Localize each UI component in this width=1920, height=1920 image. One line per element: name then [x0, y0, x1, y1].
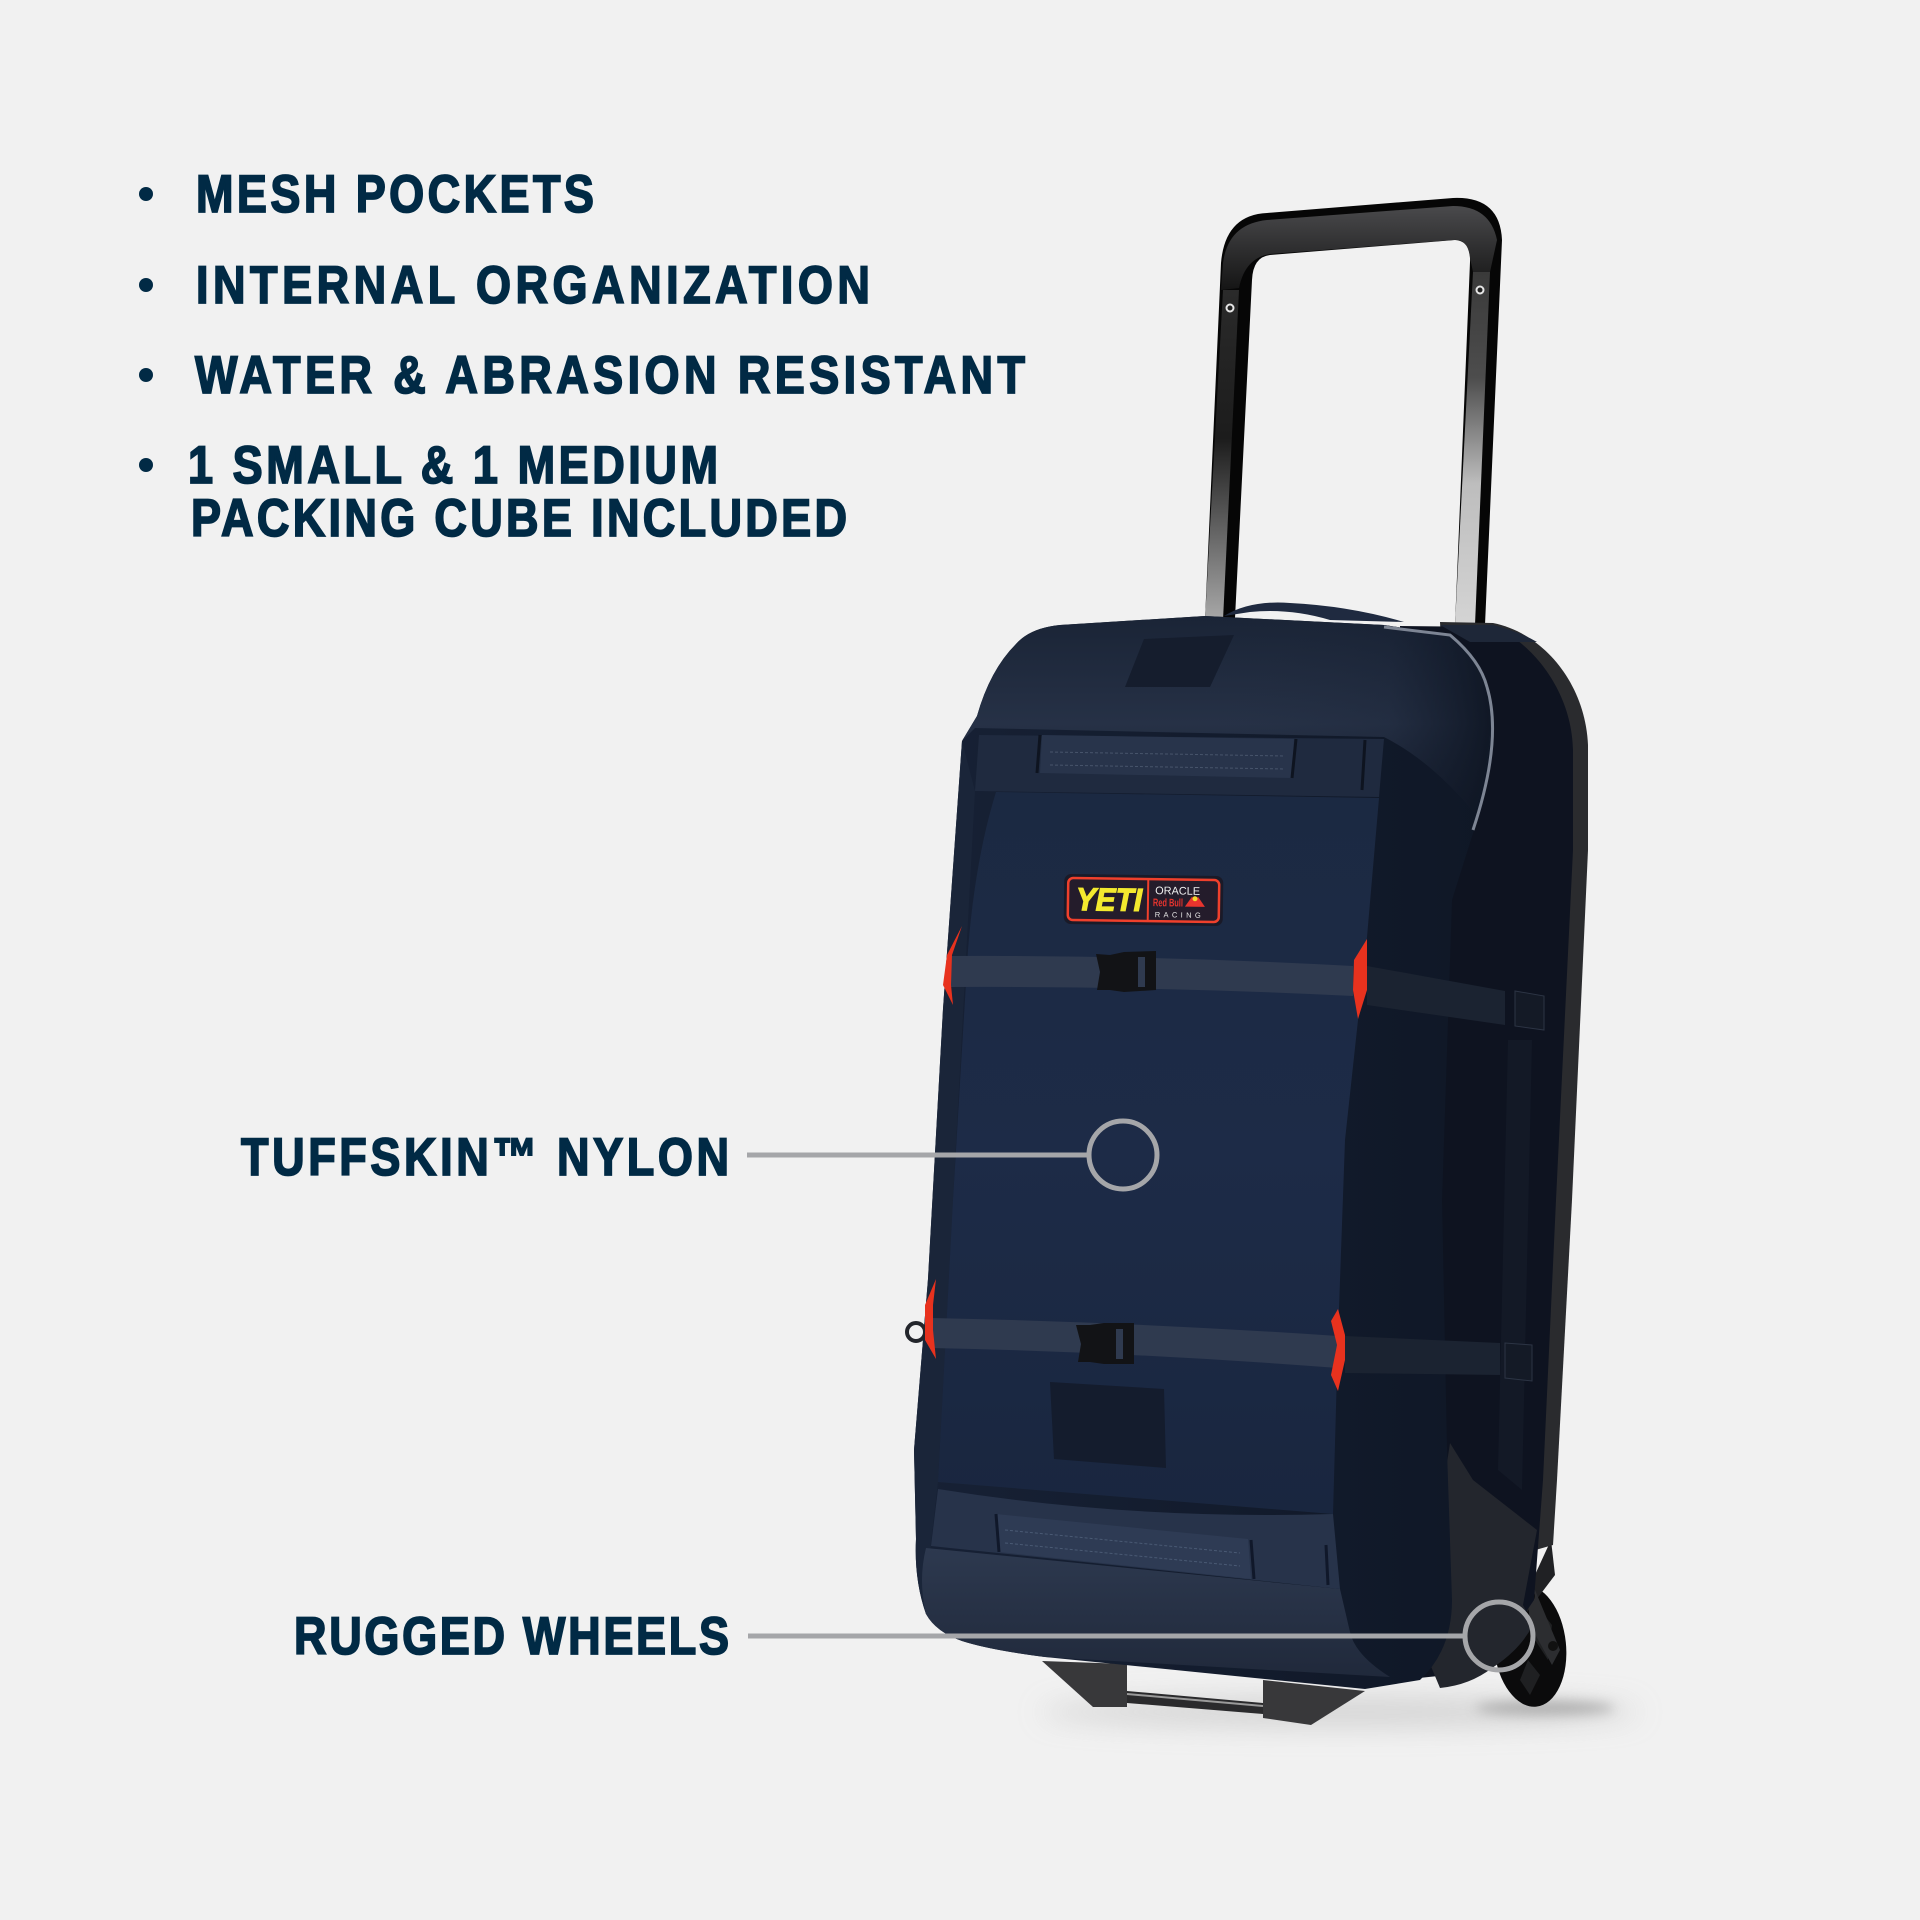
patch logo: YETI Oracle Red Bull Racing: ORACLE	[1155, 885, 1200, 898]
dark side panel	[1400, 626, 1573, 1680]
bullet: packing cubes	[139, 436, 847, 548]
top velcro patch	[1125, 635, 1234, 687]
patch logo: YETI Oracle Red Bull Racing	[1064, 874, 1223, 926]
patch logo: YETI Oracle Red Bull Racing: Red Bull	[1153, 897, 1183, 910]
top grab handle	[975, 735, 1384, 797]
bag body	[914, 616, 1493, 1689]
top panel	[962, 616, 1490, 812]
red tab left	[943, 926, 962, 1005]
lower side corner	[1420, 1443, 1537, 1688]
bullet: packing cubes: PACKING CUBE INCLUDED	[191, 489, 847, 548]
upper buckle	[1096, 951, 1156, 992]
lower buckle	[1076, 1323, 1134, 1364]
patch logo: YETI Oracle Red Bull Racing: YETI	[1076, 881, 1143, 918]
rear feet	[1042, 1661, 1365, 1725]
top band of side panel	[1440, 625, 1537, 642]
callout: Tuffskin nylon	[241, 1121, 1157, 1189]
base panel	[922, 1548, 1390, 1677]
callout: rugged wheels	[294, 1602, 1533, 1670]
upper strap	[943, 926, 1544, 1030]
carry strap on top	[1224, 603, 1404, 622]
outer shell	[1440, 622, 1588, 1560]
callout: Tuffskin nylon: TUFFSKIN™ NYLON	[241, 1128, 729, 1187]
ground shadow	[1040, 1698, 1640, 1726]
lower strap	[907, 1279, 1532, 1391]
lower velcro patch	[1050, 1382, 1166, 1468]
telescopic handle	[1205, 198, 1502, 625]
bullet: packing cubes: 1 SMALL & 1 MEDIUM	[188, 436, 718, 495]
red tab left	[925, 1279, 936, 1359]
patch logo: YETI Oracle Red Bull Racing: RACING	[1155, 910, 1201, 920]
side strap column	[1498, 1040, 1532, 1490]
product: wheeled luggage	[907, 198, 1640, 1726]
bullet: water and abrasion resistant: WATER & ABRASION RESISTANT	[195, 346, 1025, 405]
wheel arm	[1527, 1540, 1555, 1612]
callout: rugged wheels: RUGGED WHEELS	[294, 1607, 729, 1666]
bottom grab handle	[931, 1489, 1340, 1589]
red tab right	[1331, 1309, 1345, 1391]
zipper line	[1384, 627, 1493, 830]
red tab right	[1353, 939, 1367, 1019]
wheel	[1488, 1540, 1572, 1710]
feature list	[139, 165, 1025, 548]
left edge strip	[914, 741, 975, 1614]
bullet: internal organization: INTERNAL ORGANIZATION	[196, 256, 870, 315]
bullet: mesh pockets: MESH POCKETS	[196, 165, 594, 224]
centre panel	[938, 792, 1379, 1514]
